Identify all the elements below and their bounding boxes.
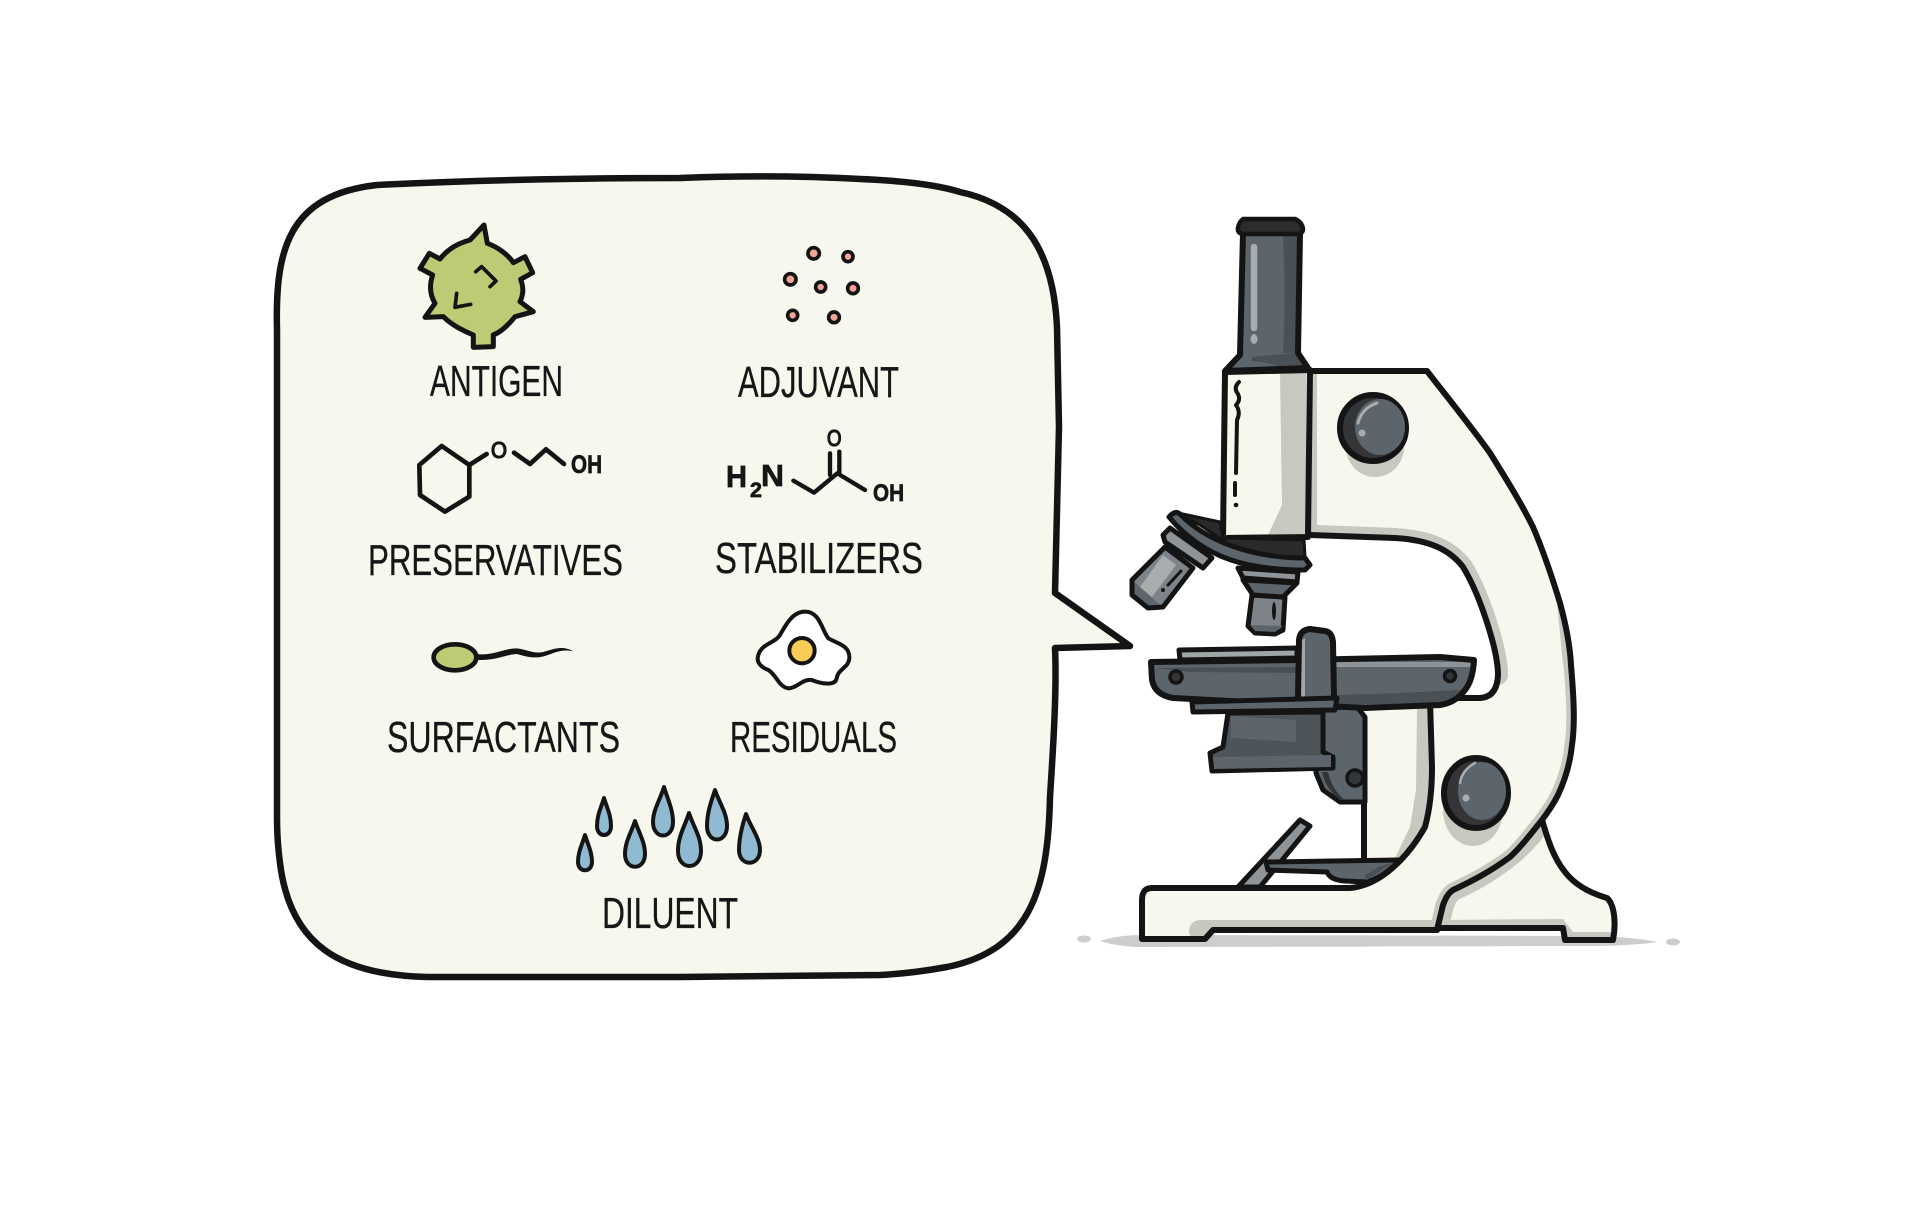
icon: preservative molecule: O [491,437,507,463]
icon: stabilizer molecule: N [761,458,784,493]
label: adjuvant: ADJUVANT [738,358,899,407]
label: stabilizers: STABILIZERS [715,534,923,583]
nosepiece [1169,513,1310,570]
icon: antigen virus [420,225,533,347]
lamp platform [1266,860,1400,882]
icon: stabilizer molecule: OH [873,480,904,507]
speech bubble panel [277,176,1130,977]
stage [1151,648,1474,708]
column [1363,700,1432,862]
mirror lever [1238,820,1310,887]
label: residuals: RESIDUALS [730,713,897,762]
left objective lens [1132,528,1212,608]
stage clip bar [1192,698,1337,712]
icon: preservative molecule [419,437,602,512]
microscope [1132,219,1615,940]
icon: fried egg [758,612,849,688]
right objective lens [1238,568,1298,634]
back bracket [1316,707,1365,802]
icon: surfactant molecule [434,644,573,670]
eyepiece tube [1225,219,1308,371]
right foot [1435,820,1615,940]
body tube with scale [1223,370,1310,538]
label: preservatives: PRESERVATIVES [368,536,623,585]
label: diluent: DILUENT [602,889,738,938]
icon: diluent water drops [578,787,760,870]
slide holder post [1298,629,1334,698]
label: surfactants: SURFACTANTS [387,713,620,762]
icon: adjuvant particles [785,248,858,323]
ground shadow [1077,935,1680,947]
icon: stabilizer molecule: 2 [750,479,762,502]
icon: preservative molecule: OH [571,451,602,479]
icon: stabilizer molecule: O [827,425,842,451]
icon: stabilizer molecule [726,425,904,507]
icon: stabilizer molecule: H [726,459,747,494]
lower stage block [1210,712,1333,771]
label: antigen: ANTIGEN [430,357,563,406]
lower knob [1443,758,1508,846]
upper knob [1340,395,1406,477]
arm and base body [1142,371,1574,939]
